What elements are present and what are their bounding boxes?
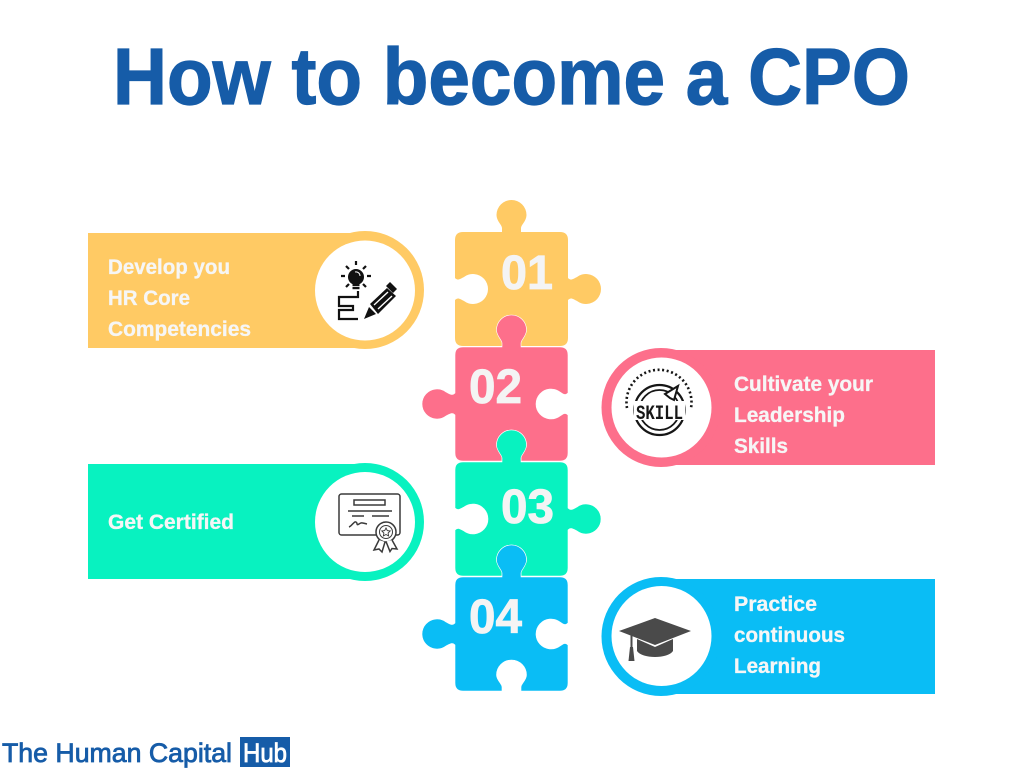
number 03: 03	[501, 481, 554, 534]
text: step 1 label	[108, 256, 251, 341]
title: How to become a CPO	[113, 32, 910, 121]
text: step 4 label: Practice	[734, 593, 817, 616]
panel: step 1 banner	[88, 231, 424, 349]
text: step 2 label: Skills	[734, 435, 788, 458]
icon: skill gauge	[626, 370, 692, 435]
icon: skill gauge: SKILL	[636, 403, 683, 426]
icon: certificate with seal	[339, 494, 400, 552]
text: step 3 label: Get Certified	[108, 511, 234, 534]
logo: The Human Capital Hub: The Human Capital	[2, 738, 232, 768]
number 02: 02	[469, 361, 522, 414]
text: step 2 label: Cultivate your	[734, 373, 873, 396]
puzzle piece 02	[422, 315, 568, 461]
puzzle piece 03	[455, 430, 601, 576]
text: step 4 label: Learning	[734, 655, 821, 678]
text: step 4 label	[734, 593, 845, 678]
puzzle piece 04	[422, 545, 568, 691]
panel: step 3 banner	[88, 463, 424, 581]
number 01: 01	[501, 247, 553, 300]
logo: The Human Capital Hub: Hub	[243, 738, 287, 768]
panel: step 2 banner	[602, 348, 935, 467]
icon: graduation cap	[619, 618, 691, 661]
panel: step 4 banner	[602, 577, 935, 696]
text: step 2 label: Leadership	[734, 404, 845, 427]
text: step 2 label	[734, 373, 873, 458]
number 04: 04	[469, 591, 522, 644]
text: step 1 label: Develop you	[108, 256, 230, 279]
icon: lightbulb and pencil	[339, 261, 397, 319]
puzzle piece 01	[455, 200, 601, 346]
text: step 1 label: Competencies	[108, 318, 251, 341]
text: step 4 label: continuous	[734, 624, 845, 647]
text: step 1 label: HR Core	[108, 287, 190, 310]
